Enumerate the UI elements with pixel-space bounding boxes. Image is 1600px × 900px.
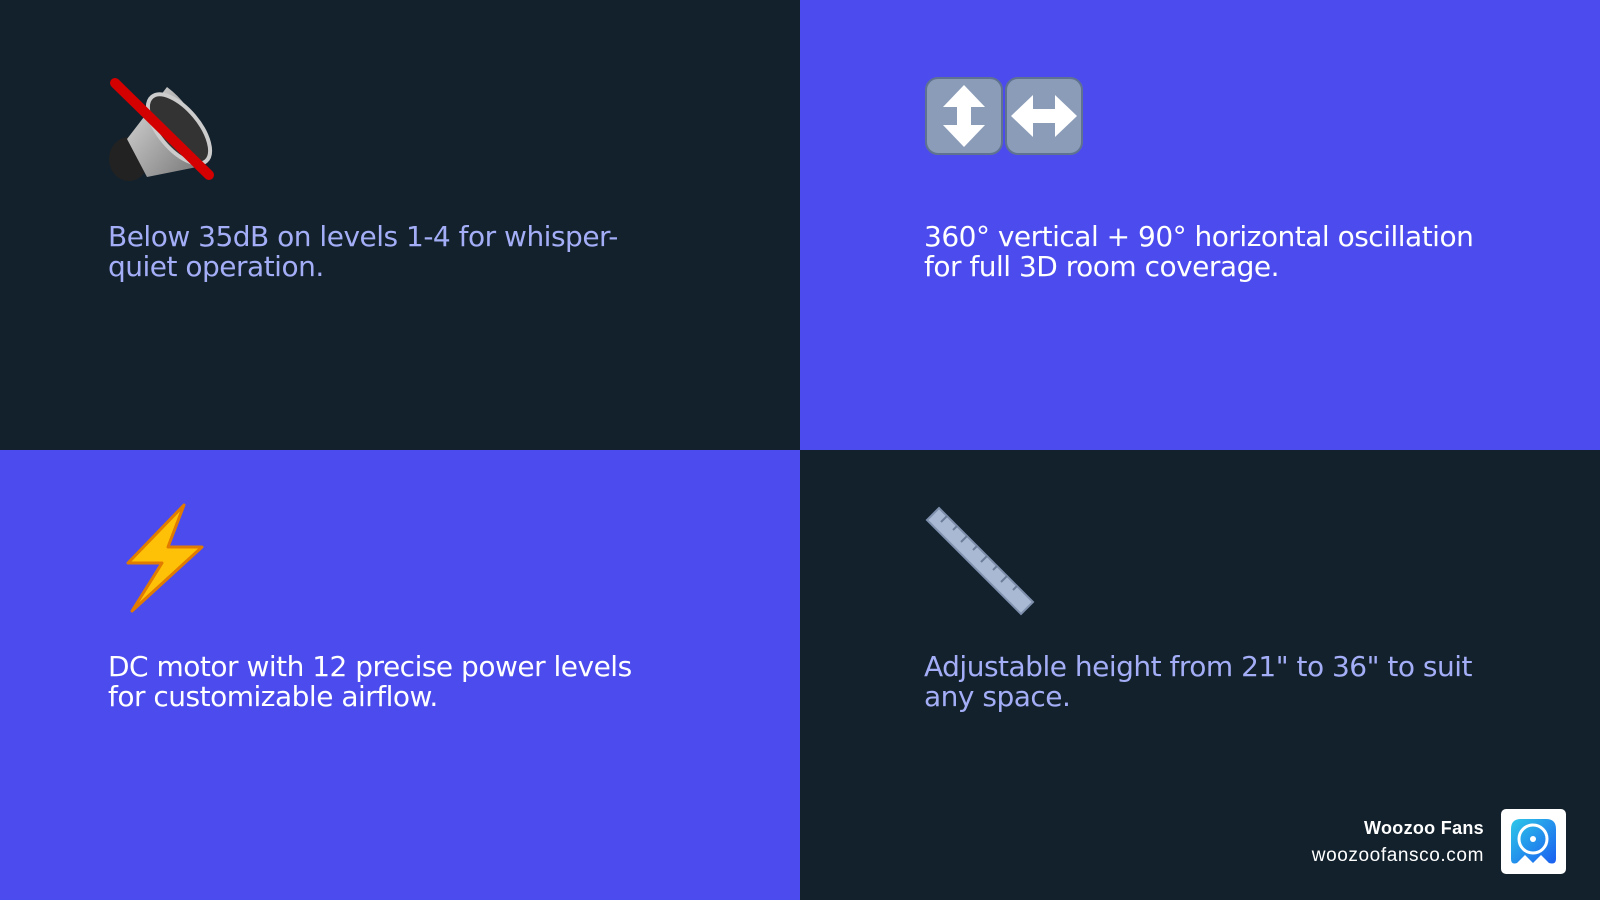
panel: oscillation [800, 0, 1600, 450]
logo [1501, 809, 1566, 874]
text: motor: DC motor with 12 precise power levels [108, 650, 632, 683]
icon: arrows [925, 77, 1083, 155]
text: quiet: quiet operation. [108, 250, 324, 283]
text: motor: for customizable airflow. [108, 680, 438, 713]
text: quiet: Below 35dB on levels 1-4 for whisper- [108, 220, 618, 253]
brand name: Woozoo Fans [1364, 818, 1484, 838]
brand block [1312, 809, 1566, 874]
panel: motor [0, 450, 800, 900]
text: quiet [108, 220, 618, 283]
panel: height [800, 450, 1600, 900]
text: oscillation: for full 3D room coverage. [924, 250, 1279, 283]
icon: muted speaker [109, 78, 214, 181]
icon: lightning [126, 504, 204, 612]
text: height [924, 650, 1472, 713]
text: oscillation [924, 220, 1473, 283]
text: oscillation: 360° vertical + 90° horizontal oscillation [924, 220, 1473, 253]
brand url: woozoofansco.com [1312, 845, 1484, 866]
text: height: Adjustable height from 21" to 36" to suit [924, 650, 1472, 683]
text: height: any space. [924, 680, 1070, 713]
icon: ruler [926, 506, 1034, 616]
panel: quiet [0, 0, 800, 450]
text: motor [108, 650, 632, 713]
